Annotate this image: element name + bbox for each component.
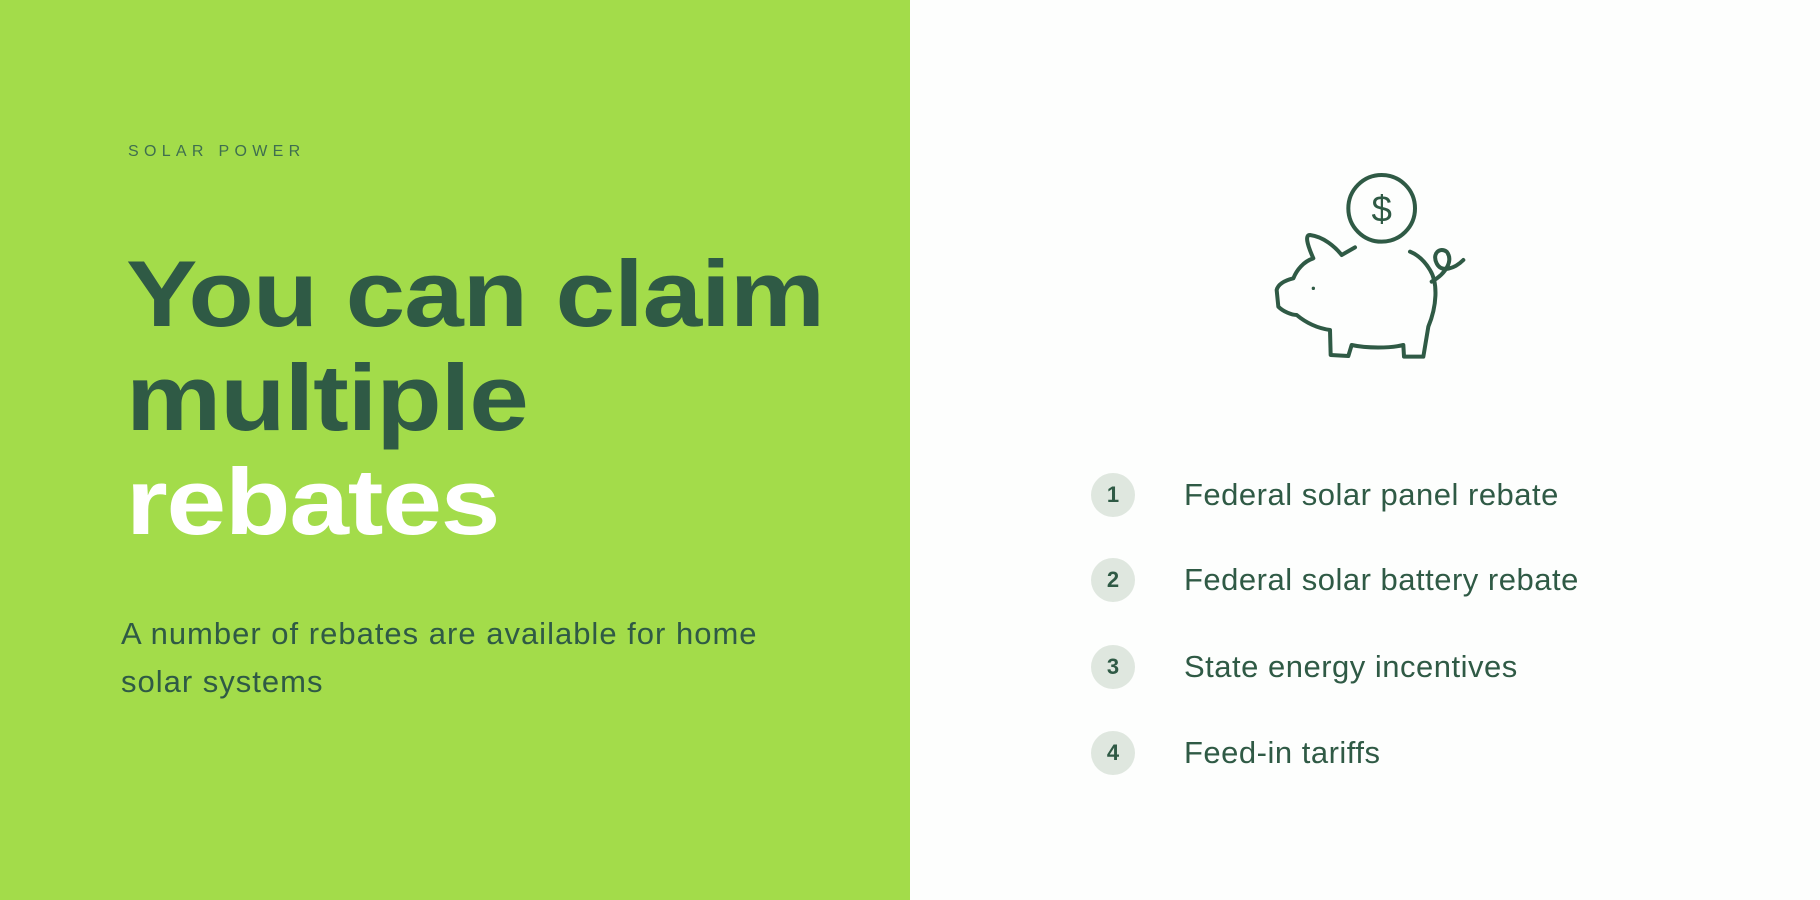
eyebrow: SOLAR POWER [128, 143, 305, 160]
title: You can claim [126, 241, 824, 346]
subtitle: A number of rebates are available for home solar systems [121, 616, 758, 699]
panel: left green [0, 0, 910, 900]
list item 2 [1091, 558, 1579, 602]
list item 4: Feed-in tariffs [1184, 735, 1380, 770]
list item 2: 2 [1107, 567, 1119, 592]
title: multiple [126, 345, 528, 450]
icon: piggy bank: $ [1371, 189, 1392, 230]
icon: piggy bank [1274, 173, 1466, 359]
list item 4 [1091, 731, 1380, 775]
list item 1 [1091, 473, 1559, 517]
list item 2: Federal solar battery rebate [1184, 562, 1579, 597]
list item 4: 4 [1107, 740, 1119, 765]
list item 1: 1 [1107, 482, 1119, 507]
list item 1: Federal solar panel rebate [1184, 477, 1559, 512]
title [126, 241, 824, 554]
list item 3 [1091, 645, 1518, 689]
list item 3: 3 [1107, 654, 1119, 679]
title: rebates [126, 449, 499, 554]
list item 3: State energy incentives [1184, 649, 1518, 684]
